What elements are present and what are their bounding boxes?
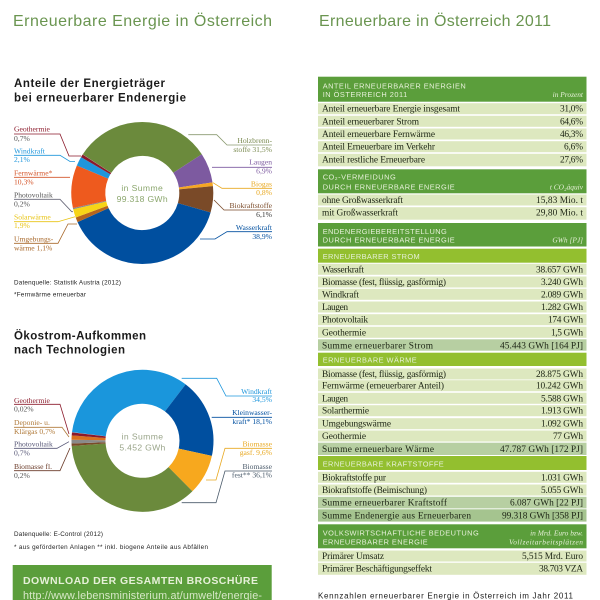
label: Holzbrennstoffe: stoffe 31,5% [233,145,273,154]
label: Windkraft [182,378,273,404]
row [318,264,586,275]
row: 2.089 GWh [541,290,583,300]
section header: CO2 avoidance: DURCH ERNEUERBARE ENERGIE [323,182,455,191]
label: Solarwärme [14,212,75,230]
row: 15,83 Mio. t [536,196,583,206]
label: Biogas: Biogas [251,180,272,188]
label: Biomasse flüssig: Biomasse fl. [14,462,52,471]
row [318,405,586,417]
label: Deponie- und Klärgas [14,418,69,437]
row [318,302,586,313]
row: Anteil restliche Erneuerbare [322,155,425,165]
row: fuel total: 6.087 GWh [22 PJ] [510,499,583,509]
label: Kleinwasserkraft: Kleinwasser- [232,408,272,417]
label: Windkraft: 34,5% [252,395,273,404]
heading: share of energy sources [14,78,186,104]
label: Fernwärme: 10,3% [14,178,34,186]
section header: share of renewables [318,77,586,102]
label: Holzbrennstoffe [188,135,273,154]
label: Geothermie [14,124,81,156]
label: Geothermie: 0,7% [14,134,30,143]
row [318,327,586,338]
section header: share of renewables: in Prozent [553,90,584,99]
label: Windkraft: Windkraft [241,387,273,396]
donut chart: green electricity [82,381,203,501]
heading: share of energy sources: bei erneuerbarer Endenergie [14,92,186,104]
donut centre total: in Summe [122,432,163,442]
label: Windkraft [14,146,75,164]
source note: E-Control: Datenquelle: E-Control (2012) [14,531,103,538]
row: 10.242 GWh [536,382,583,392]
row: Anteil Erneuerbare im Verkehr [322,143,436,153]
label: Wasserkraft: 38,9% [252,232,273,241]
row: 77 GWh [553,432,583,442]
subheader: renewable heat: ERNEUERBARE WÄRME [323,356,417,365]
row: final energy total: Summe Endenergie aus Erneuerbaren [322,511,471,521]
subheader: renewable electricity: ERNEUERBARER STROM [323,252,420,261]
label: Biomasse gasförmig: gasf. 9,6% [240,448,273,457]
label: Wasserkraft: Wasserkraft [236,223,273,232]
row [318,550,586,562]
label: Biomasse flüssig [14,448,70,480]
row: Geothermie [322,432,366,442]
row: Anteil erneuerbare Fernwärme [322,130,435,140]
label: Photovoltaik: Photovoltaik [14,440,53,449]
label: Solarwärme: Solarwärme [14,212,51,222]
row [318,393,586,404]
panel: share of energy sources [14,78,273,298]
row: Laugen [322,394,348,404]
row [318,116,586,127]
label: Laugen [212,158,273,176]
donut chart: final energy shares [68,118,217,268]
row: 5.055 GWh [541,486,583,496]
donut centre total: 99.318 GWh [117,194,168,204]
label: Biokraftstoffe [214,200,273,219]
row: 174 GWh [548,316,583,326]
row: Biokraftstoffe (Beimischung) [322,485,427,496]
row [318,194,586,206]
title: left column: Erneuerbare Energie in Österreich [13,12,272,30]
section header: CO2 avoidance [318,169,586,193]
section header: final energy supply [318,223,586,246]
row: heat total [318,443,586,455]
row [318,128,586,140]
heading: green electricity: Ökostrom-Aufkommen [14,330,146,342]
row: 64,6% [560,117,583,127]
label: Windkraft: 2,1% [14,155,30,164]
row [318,430,586,442]
row [318,368,586,380]
row [318,154,586,166]
label: Umgebungswärme: wärme 1,1% [14,244,53,252]
row [318,276,586,288]
row: heat total: Summe erneuerbare Wärme [322,445,434,455]
heading: green electricity [14,330,146,356]
row: Umgebungswärme [322,420,391,430]
row [318,472,586,483]
row: electricity total: 45.443 GWh [164 PJ] [500,341,583,351]
donut centre total: 5.452 GWh [119,442,166,452]
section header: economic significance: in Mrd. Euro bzw. [530,529,583,538]
label: Umgebungswärme: Umgebungs- [14,234,54,244]
row: 1.282 GWh [541,303,583,313]
source note: Statistik Austria: *Fernwärme erneuerbar [14,291,86,298]
row [318,484,586,496]
row: 5.588 GWh [541,394,583,404]
row [318,563,586,575]
row: Fernwärme (erneuerbarer Anteil) [322,381,444,392]
section header: economic significance [318,524,586,548]
row: 1,5 GWh [551,328,583,338]
label: Deponie- und Klärgas: Deponie- u. [14,418,50,427]
row: final energy total: 99.318 GWh [358 PJ] [502,511,583,521]
subheader: renewable electricity [318,249,586,263]
row: Anteil erneuerbare Energie insgesamt [322,105,460,115]
label: Fernwärme: Fernwärme* [14,168,53,178]
panel: key figures table [318,77,586,575]
donut centre total [119,432,166,452]
label: Photovoltaik: 0,7% [14,449,30,458]
row [318,141,586,153]
label: Geothermie: Geothermie [14,396,50,405]
row: Photovoltaik [322,316,368,326]
row: 38.657 GWh [536,265,583,275]
label: Solarwärme: 1,9% [14,221,30,230]
row [318,207,586,220]
donut centre total [117,183,168,204]
row: Wasserkraft [322,264,364,275]
subheader: renewable heat [318,353,586,366]
label: Photovoltaik: Photovoltaik [14,190,53,200]
panel: green electricity by technology [14,330,273,551]
label: Laugen: 6,9% [256,166,273,176]
label: Windkraft: Windkraft [14,146,46,156]
row: 31,0% [560,105,583,115]
label: Laugen: Laugen [249,158,272,166]
row: ohne Großwasserkraft [322,195,403,206]
label: Biomasse flüssig: 0,2% [14,471,30,480]
row: Solarthermie [322,407,369,417]
row: 6,6% [564,143,583,153]
section header: economic significance: ERNEUERBARER ENERGIE [323,538,428,547]
label: Kleinwasserkraft [212,408,273,426]
row [318,418,586,430]
label: Biokraftstoffe: 6,1% [256,210,273,219]
row: 46,3% [560,130,583,140]
row: Laugen [322,303,348,313]
label: Biogas [213,180,273,197]
row: 27,6% [560,155,583,165]
row: electricity total [318,339,586,351]
label: Biomasse gasförmig [206,439,273,480]
row: heat total: 47.787 GWh [172 PJ] [500,445,583,455]
label: Geothermie [14,396,69,434]
label: Biomasse fest: fest** 36,1% [232,470,273,480]
row: Biokraftstoffe pur [322,472,387,483]
source note: Statistik Austria: Datenquelle: Statistik Austria (2012) [14,279,121,286]
label: Wasserkraft [200,223,273,241]
section header: CO2 avoidance: t CO₂äquiv [550,182,584,191]
label: Photovoltaik [14,440,69,458]
row: Primärer Beschäftigungseffekt [322,563,432,574]
label: Biogas: 0,8% [256,188,273,197]
row: 3.240 GWh [541,278,583,288]
section header: economic significance: VOLKSWIRTSCHAFTLICHE BEDEUTUNG [323,529,479,538]
heading: green electricity: nach Technologien [14,344,125,356]
row: electricity total: Summe erneuerbarer Strom [322,341,434,351]
label: Photovoltaik: 0,2% [14,200,30,208]
section header: final energy supply: ENDENERGIEBEREITSTELLUNG [323,227,447,236]
row: 5,515 Mrd. Euro [522,552,583,562]
label: Biomasse fest [182,462,273,503]
label: Biomasse gasförmig: Biomasse [242,439,273,448]
heading: share of energy sources: Anteile der Energieträger [14,78,166,90]
label: Kleinwasserkraft: kraft* 18,1% [232,417,273,426]
label: Geothermie: 0,02% [14,405,34,414]
section header: final energy supply: DURCH ERNEUERBARE ENERGIE [323,236,455,245]
section header: share of renewables: ANTEIL ERNEUERBARER ENERGIEN [323,82,466,91]
section header: final energy supply: GWh [PJ] [552,236,583,245]
row: 38.703 VZA [539,564,583,574]
row: Geothermie [322,328,366,338]
label: Biomasse fest: Biomasse [242,462,273,471]
section header: CO2 avoidance: CO₂-VERMEIDUNG [323,173,396,182]
label: Umgebungswärme [14,224,77,252]
label: Fernwärme [14,168,70,186]
row: fuel total [318,497,586,509]
row [318,289,586,300]
callout: brochure download: DOWNLOAD DER GESAMTEN BROSCHÜRE [23,574,258,587]
source note: E-Control [14,531,208,551]
donut centre total: in Summe [121,183,163,193]
label: Geothermie: Geothermie [14,124,50,134]
callout: brochure download [13,565,272,600]
subheader: renewable fuels: ERNEUERBARE KRAFTSTOFFE [323,459,444,468]
row: Biomasse (fest, flüssig, gasförmig) [322,369,446,380]
row: Windkraft [322,289,359,300]
label: Holzbrennstoffe: Holzbrenn- [237,136,272,145]
source note: Statistik Austria [14,279,121,298]
row: Primärer Umsatz [322,552,384,562]
row: Anteil erneuerbarer Strom [322,117,420,127]
title: right column: Erneuerbare in Österreich 2011 [319,12,551,30]
row [318,380,586,392]
row: 1.092 GWh [541,420,583,430]
label: Biokraftstoffe: Biokraftstoffe [230,201,273,210]
section header: economic significance: Vollzeitarbeitsplätzen [509,538,583,547]
row: mit Großwasserkraft [322,208,398,219]
row: 1.913 GWh [541,407,583,417]
row [318,314,586,326]
row: 1.031 GWh [541,473,583,483]
row: final energy total [318,509,586,522]
row [318,103,586,115]
label: Photovoltaik [14,190,73,212]
row: Biomasse (fest, flüssig, gasförmig) [322,277,446,288]
section header: share of renewables: IN ÖSTERREICH 2011 [323,90,407,99]
subheader: renewable fuels [318,456,586,470]
source note: E-Control: * aus geförderten Anlagen ** inkl. biogene Anteile aus Abfällen [14,544,208,551]
row: 28.875 GWh [536,370,583,380]
label: Deponie- und Klärgas: Klärgas 0,7% [14,427,56,436]
row: fuel total: Summe erneuerbarer Kraftstoff [322,498,448,509]
row: 29,80 Mio. t [536,209,583,219]
